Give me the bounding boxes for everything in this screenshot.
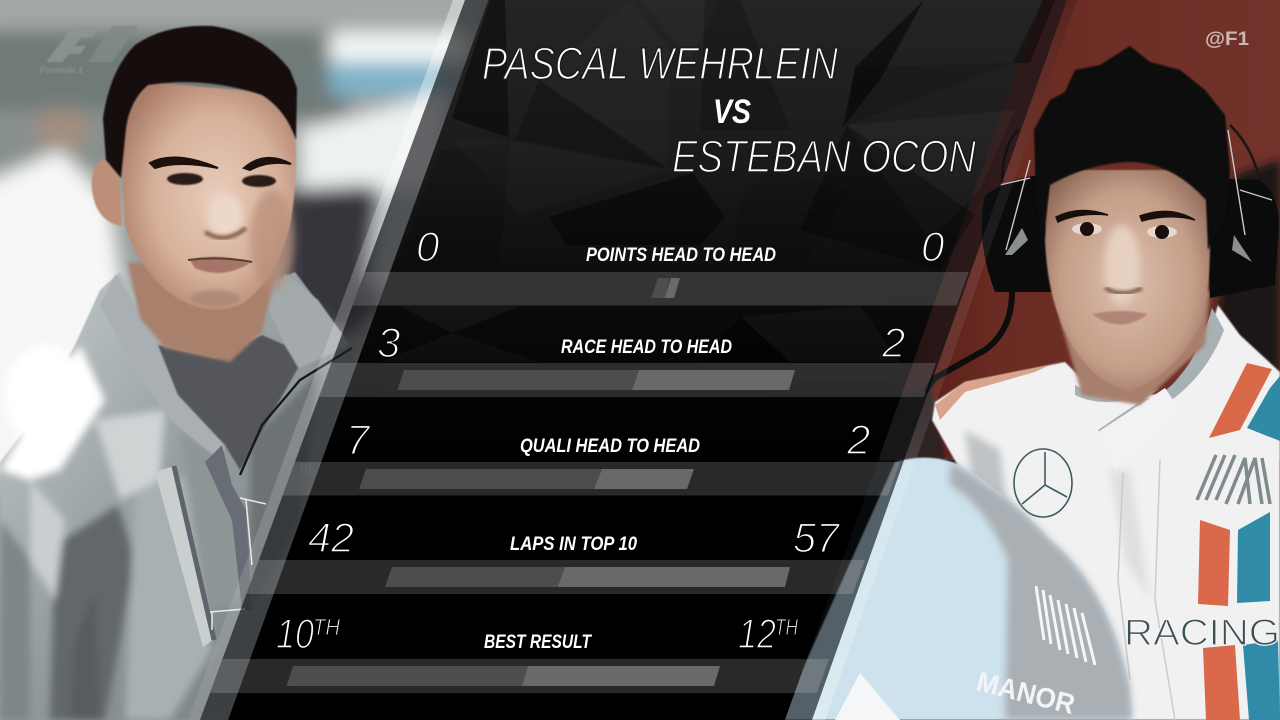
- foreground helmet: [780, 458, 1132, 720]
- source credit: @F1: [1205, 29, 1249, 50]
- hair: [103, 26, 297, 178]
- stat row 2: [377, 319, 905, 366]
- stat row 3: [346, 416, 870, 463]
- label: points: POINTS HEAD TO HEAD: [586, 245, 776, 266]
- Ocon best suffix: TH: [775, 614, 798, 640]
- red wall background: [880, 0, 1280, 460]
- neck: [1060, 290, 1210, 405]
- dark figure behind: [880, 385, 945, 460]
- Wehrlein quali: 7: [346, 416, 371, 463]
- mouth: [190, 257, 250, 273]
- low-poly facets: [380, 0, 1055, 362]
- RACING text: RACING: [1124, 612, 1280, 653]
- collar: [1075, 308, 1224, 440]
- title: Pascal Wehrlein: PASCAL WEHRLEIN: [482, 38, 838, 89]
- stat stripes: [210, 272, 969, 693]
- Ocon laps: 57: [793, 514, 841, 561]
- bar row: laps in top 10: [385, 567, 790, 587]
- left slanted light band: [188, 0, 465, 720]
- eyebrows: [1056, 210, 1108, 222]
- neck: [128, 262, 275, 362]
- photo: Esteban Ocon: [780, 0, 1280, 720]
- race suit: [932, 305, 1280, 720]
- Wehrlein race: 3: [377, 319, 400, 366]
- suit logo: [1197, 455, 1270, 504]
- dark right background: [1215, 160, 1280, 400]
- bar row: best result: [286, 666, 720, 686]
- title: vs: VS: [713, 93, 751, 131]
- face: [92, 82, 296, 310]
- central dark panel: [228, 0, 1055, 720]
- Ocon race: 2: [881, 319, 905, 366]
- pocket: [155, 466, 213, 647]
- right collar: [268, 274, 350, 368]
- left collar: [100, 274, 225, 462]
- left slanted dark band: [200, 0, 488, 720]
- Wehrlein points: 0: [416, 223, 440, 270]
- inner sweater: [158, 335, 298, 470]
- Wehrlein laps: 42: [308, 514, 354, 561]
- Wehrlein best: 10: [276, 610, 315, 657]
- label: laps: LAPS IN TOP 10: [510, 534, 637, 555]
- manor wordmark: MANOR: [974, 666, 1078, 720]
- label: best result: BEST RESULT: [484, 632, 592, 653]
- photo background: blurred paddock: [0, 0, 520, 720]
- label: race: RACE HEAD TO HEAD: [561, 337, 732, 358]
- right slanted dark band: [785, 0, 1067, 720]
- Ocon quali: 2: [846, 416, 870, 463]
- jacket: [0, 272, 356, 720]
- right slanted light band: [812, 0, 1077, 720]
- label: quali: QUALI HEAD TO HEAD: [520, 436, 700, 457]
- bar row: points head to head: [651, 278, 680, 298]
- Ocon points: 0: [921, 223, 945, 270]
- white triangle: [835, 673, 900, 720]
- eyes: [167, 173, 203, 185]
- F1 logo watermark: [40, 26, 138, 75]
- bar row: race head to head: [398, 370, 795, 390]
- photo: Pascal Wehrlein: [0, 0, 520, 720]
- F1 logo watermark: Formula 1: [40, 65, 83, 75]
- suit stripes: [1209, 363, 1272, 438]
- title: Esteban Ocon: ESTEBAN OCON: [672, 131, 976, 182]
- Ocon best: 12: [738, 610, 776, 657]
- manor logo stripes: [1036, 586, 1095, 665]
- mouth: [1092, 311, 1148, 324]
- face: [1045, 170, 1210, 392]
- hair: [1034, 46, 1230, 250]
- eyebrows: [150, 158, 218, 168]
- stat row 1: [416, 223, 945, 270]
- stat row 4: [308, 514, 841, 561]
- Wehrlein best suffix: TH: [313, 614, 340, 640]
- zipper pulls: [210, 498, 266, 630]
- eyes: [1072, 223, 1102, 235]
- mercedes star: [1014, 449, 1072, 517]
- bar row: quali head to head: [359, 469, 694, 489]
- stat row 5: [276, 610, 798, 657]
- headset cups: [925, 125, 1279, 392]
